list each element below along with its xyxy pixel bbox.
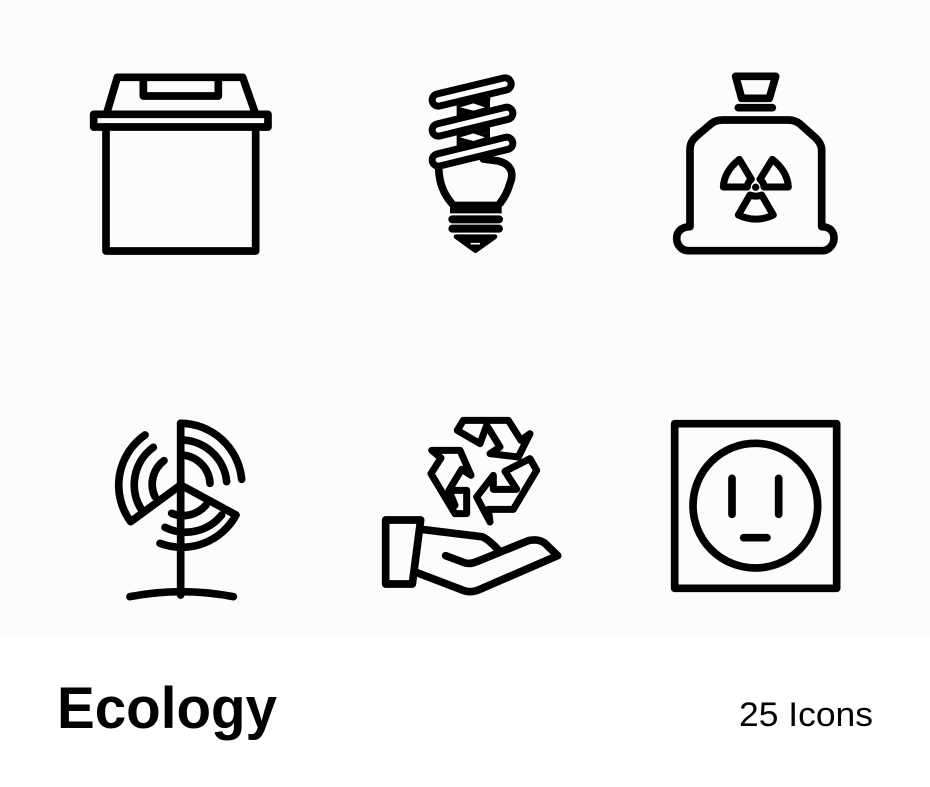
icon: power socket [675, 424, 837, 588]
icon: recycle arrows [431, 420, 537, 522]
icon: open hand [386, 520, 558, 592]
icon: radioactive waste bag [677, 76, 834, 251]
title: Ecology [57, 676, 277, 741]
icon: trash bin [94, 77, 268, 251]
icon count label: 25 Icons [739, 696, 873, 734]
icon: recycling symbol over a hand [386, 420, 558, 592]
icon: energy saving bulb [438, 84, 512, 251]
icon: wind turbine [119, 423, 242, 597]
